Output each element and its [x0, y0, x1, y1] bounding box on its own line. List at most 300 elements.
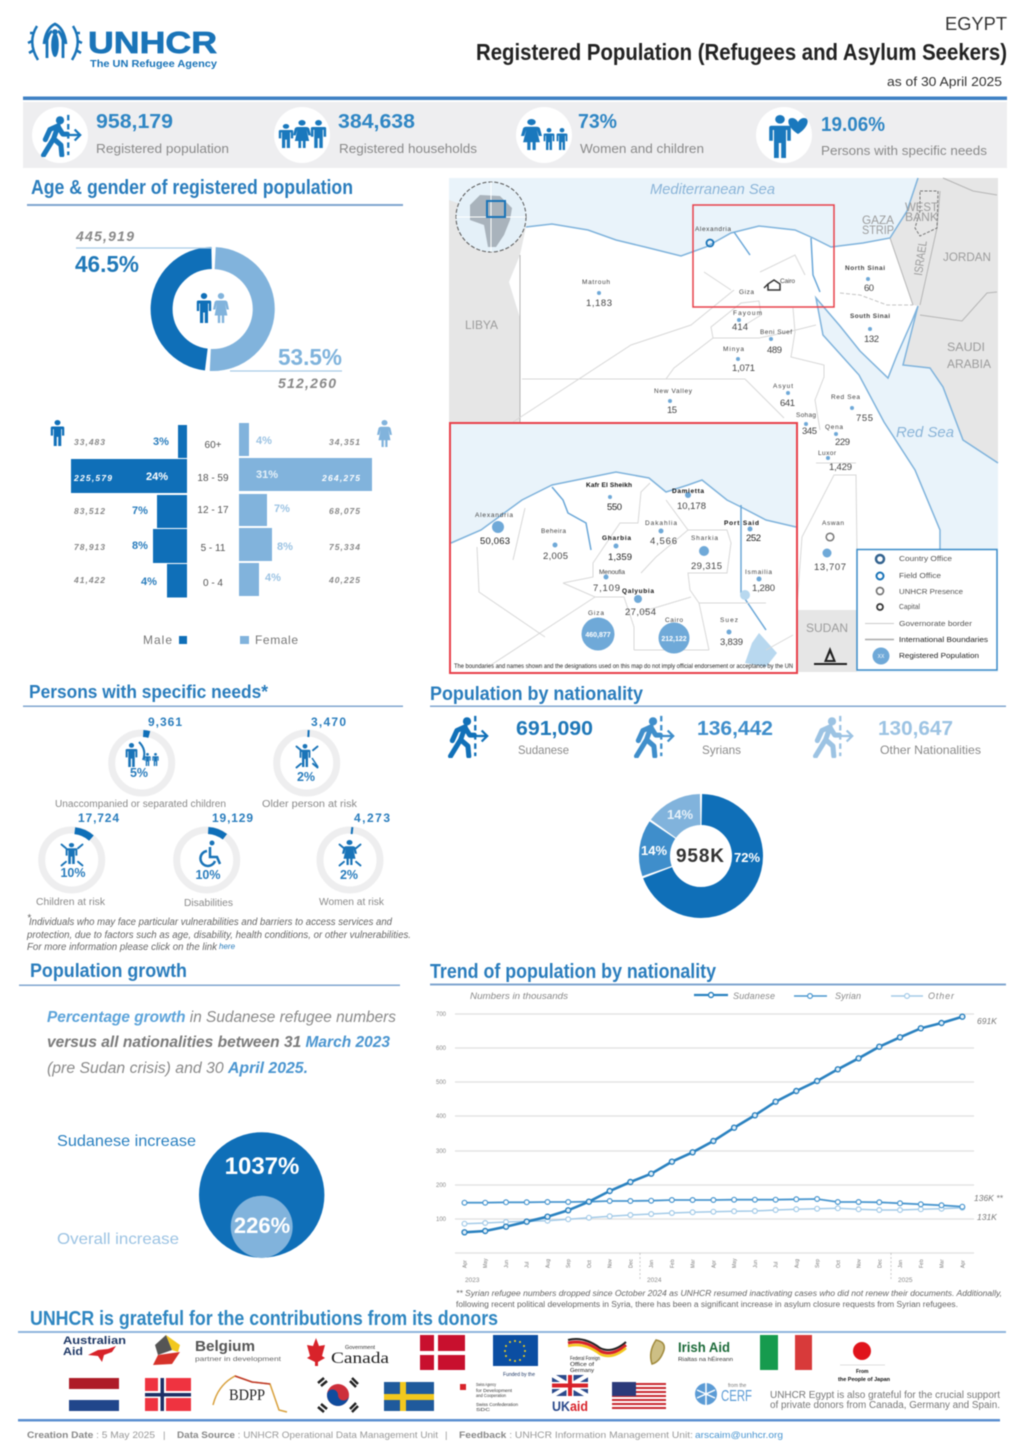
- inset labels: Gharbia: [602, 535, 631, 542]
- wordmark: UNHCR: [88, 25, 217, 60]
- nationality donut chart: 14%: [667, 807, 693, 822]
- inset labels: 1,359: [608, 552, 632, 563]
- footer: [27, 1430, 783, 1441]
- map labels: seas and countries: ISRAEL: [911, 240, 930, 276]
- Egypt land: [509, 224, 940, 610]
- donor: Switzerland: Swiss Agency: [476, 1382, 497, 1387]
- donor: Belgium: partner in development: [195, 1357, 281, 1363]
- map legend: International Boundaries: [899, 635, 988, 644]
- donor: Irish Aid: Rialtas na hÉireann: [678, 1356, 733, 1363]
- donor: Irish Aid: Irish Aid: [678, 1339, 730, 1355]
- grid and axis: Jun: [753, 1260, 759, 1268]
- stat: Syrians: 136,442: [697, 718, 773, 740]
- inset labels: Giza: [588, 610, 604, 617]
- gender donut chart: 46.5%: [75, 251, 139, 277]
- need: children at risk: 10%: [60, 866, 86, 880]
- need: women at risk: 2%: [340, 868, 358, 882]
- map labels: seas and countries: BANK: [905, 210, 938, 224]
- inset labels: 7,109: [593, 583, 620, 594]
- series: Sudanese: [464, 1017, 962, 1232]
- heading: Age & gender of registered population: [31, 177, 353, 199]
- neighbouring land: [449, 178, 998, 672]
- heading: Population by nationality: [430, 684, 643, 705]
- chart legend: Sudanese: [733, 991, 775, 1001]
- series end labels: 691K: [977, 1016, 997, 1026]
- need: disabilities: 10%: [195, 868, 221, 882]
- need: disabilities: [177, 811, 253, 909]
- nationality donut chart: 14%: [641, 843, 667, 858]
- map labels: governorates: 641: [780, 398, 795, 409]
- male values: 3%: [153, 436, 169, 448]
- map labels: governorates: Beni Suef: [760, 329, 792, 336]
- female values: 4%: [265, 572, 281, 584]
- heading: Persons with specific needs*: [29, 682, 268, 702]
- female values: [256, 435, 360, 585]
- map labels: seas and countries: GAZA: [862, 213, 894, 227]
- map labels: seas and countries: SUDAN: [806, 621, 848, 635]
- donor: Australian Aid: Aid: [63, 1346, 83, 1358]
- age labels: 5 - 11: [201, 543, 226, 554]
- inset bubbles: [492, 492, 762, 654]
- grid and axis: 700: [436, 1012, 447, 1018]
- map labels: governorates: [582, 226, 890, 573]
- map labels: seas and countries: JORDAN: [943, 250, 991, 264]
- KPI: persons with specific needs: 19.06%: [821, 114, 885, 136]
- map labels: governorates: New Valley: [654, 388, 693, 395]
- need: older person at risk: Older person at risk: [262, 799, 358, 810]
- panel: persons with specific needs: [23, 682, 411, 953]
- map labels: governorates: 1,183: [586, 298, 612, 309]
- private donors note: [770, 1390, 1000, 1411]
- map labels: governorates: 489: [767, 345, 782, 356]
- need: older person at risk: [262, 715, 358, 810]
- pyramid legend: Female: [255, 633, 298, 647]
- Sinai governorate divide: [840, 293, 913, 305]
- private donors note: UNHCR Egypt is also grateful for the crucial support: [770, 1390, 1000, 1401]
- donor: Japan: the People of Japan: [838, 1377, 891, 1383]
- grid and axis: Oct: [836, 1260, 842, 1268]
- grid and axis: Aug: [546, 1259, 552, 1268]
- footer: |: [445, 1430, 447, 1441]
- donor: United States flag: [612, 1382, 666, 1409]
- KPI: women and children: [516, 107, 704, 163]
- chart legend: [694, 991, 955, 1001]
- male values: [73, 436, 169, 588]
- chart legend: Syrian: [835, 991, 861, 1001]
- map labels: governorates: North Sinai: [845, 265, 885, 272]
- donor: Sweden flag: [384, 1382, 434, 1411]
- map labels: governorates: 1,071: [732, 363, 755, 374]
- map legend: Governorate border: [899, 619, 973, 628]
- grid and axis: Jul: [774, 1262, 780, 1268]
- inset labels: Alexandria: [475, 512, 513, 519]
- map disclaimer: The boundaries and names shown and the designations used on this map do not imply official endorsement or acceptance by the UN: [454, 664, 793, 670]
- nested circle chart: [199, 1132, 324, 1258]
- need: unaccompanied or separated children: 5%: [130, 766, 148, 780]
- grid and axis: Apr: [462, 1260, 468, 1268]
- icon: wreath and sheltered figure: [28, 24, 82, 60]
- KPI band: [23, 102, 1007, 168]
- male values: 78,913: [74, 542, 105, 552]
- stat: other nationalities: [816, 716, 981, 757]
- male values: 33,483: [74, 437, 105, 447]
- title block: [476, 14, 1007, 89]
- grid and axis: Apr: [712, 1260, 718, 1268]
- need: older person at risk: 2%: [297, 770, 315, 784]
- age labels: 12 - 17: [197, 505, 229, 516]
- inset labels: 550: [607, 502, 622, 513]
- map labels: seas and countries: LIBYA: [465, 318, 498, 332]
- donor: Switzerland: SDC: [476, 1407, 491, 1412]
- age labels: [197, 440, 229, 589]
- stat: Syrians: [636, 716, 773, 757]
- grid and axis: Sep: [566, 1259, 572, 1268]
- need: children at risk: Children at risk: [36, 897, 106, 908]
- donor: Italy flag: [760, 1335, 812, 1370]
- footnote: *: [27, 913, 32, 924]
- map labels: governorates: 15: [667, 405, 677, 416]
- chart footnote: [456, 1289, 1002, 1309]
- map legend: Capital: [899, 602, 920, 611]
- female values: 68,075: [329, 506, 360, 516]
- KPI: registered population: 958,179: [96, 111, 173, 133]
- inset labels: Ismailia: [745, 569, 772, 576]
- inset labels: 212,122: [661, 636, 687, 643]
- map labels: governorates: 755: [856, 413, 873, 424]
- panel: trend of population by nationality: [430, 961, 1006, 1309]
- need: women at risk: Women at risk: [319, 897, 385, 908]
- grid and axis: Nov: [608, 1259, 614, 1268]
- inset labels: Menoufia: [599, 569, 625, 576]
- chart footnote: following recent political developments in Syria, there has been a significant increase in asylum closure requests from Syrian refugees.: [456, 1300, 958, 1309]
- series end labels: 131K: [977, 1212, 997, 1222]
- map legend: Field Office: [899, 571, 941, 580]
- map labels: seas and countries: WEST: [905, 200, 939, 214]
- map labels: governorates: Alexandria: [695, 226, 731, 233]
- donor: EU flag: [493, 1335, 538, 1378]
- map labels: governorates: 345: [802, 426, 817, 437]
- inset labels: 1,280: [752, 583, 775, 594]
- donor: Germany: [568, 1339, 626, 1374]
- donor: CERF: CERF: [721, 1388, 752, 1405]
- age labels: 0 - 4: [203, 578, 223, 589]
- map labels: seas and countries: ARABIA: [947, 357, 991, 371]
- female values: 40,225: [328, 575, 360, 585]
- nested circle chart: 1037%: [225, 1153, 299, 1180]
- donor: Switzerland: and Cooperation: [476, 1393, 506, 1398]
- footnote: For more information please click on the link: [27, 942, 218, 953]
- heading: Population growth: [30, 961, 187, 982]
- grid and axis: May: [483, 1258, 489, 1268]
- inset labels: 29,315: [691, 561, 722, 572]
- female values: 75,334: [329, 542, 360, 552]
- stat: other nationalities: 130,647: [878, 718, 953, 740]
- male values: 24%: [146, 471, 168, 483]
- donor: CERF: [695, 1383, 752, 1405]
- map labels: governorates: Sohag: [796, 412, 816, 419]
- map labels: seas and countries: STRIP: [862, 223, 894, 237]
- KPI: women and children: 73%: [578, 111, 617, 133]
- KPI: registered population: [32, 107, 229, 163]
- grid and axis: [436, 1012, 974, 1284]
- female values: 7%: [274, 503, 290, 515]
- map labels: governorates: Red Sea: [831, 394, 860, 401]
- footnote: Individuals who may face particular vulnerabilities and barriers to access services and: [29, 917, 392, 928]
- donor: Australian Aid: Australian: [63, 1335, 126, 1347]
- inset governorate lines: [477, 483, 793, 665]
- female values: 31%: [256, 469, 278, 481]
- map legend: Country Office: [899, 554, 952, 563]
- need: unaccompanied or separated children: [55, 715, 226, 810]
- grid and axis: May: [732, 1258, 738, 1268]
- inset labels: Dakahlia: [645, 520, 677, 527]
- KPI: women and children: Women and children: [580, 141, 704, 156]
- map labels: governorates: Giza: [739, 289, 754, 296]
- inset labels: Kafr El Sheikh: [586, 482, 632, 489]
- increase labels: Sudanese increase: [57, 1133, 196, 1150]
- stat: Sudanese: 691,090: [516, 718, 593, 740]
- grid and axis: Nov: [856, 1259, 862, 1268]
- grid and axis: Jan: [898, 1260, 904, 1268]
- heading: Trend of population by nationality: [430, 961, 717, 983]
- donor: Australian Aid: [63, 1335, 126, 1362]
- footer: Data Source : UNHCR Operational Data Management Unit: [177, 1430, 438, 1441]
- stat: other nationalities: Other Nationalities: [880, 743, 981, 757]
- series end labels: 136K **: [974, 1193, 1004, 1203]
- female values: 34,351: [329, 437, 360, 447]
- need: unaccompanied or separated children: 9,361: [148, 715, 182, 729]
- inset labels: Qalyubia: [622, 588, 654, 595]
- female bars: [239, 423, 372, 596]
- West Bank outline: [915, 191, 938, 236]
- UNHCR logo: [28, 24, 217, 70]
- pyramid legend: [143, 633, 298, 647]
- description: Percentage growth in Sudanese refugee numbers: [47, 1009, 396, 1026]
- map labels: seas and countries: SAUDI: [947, 340, 985, 354]
- female values: 264,275: [321, 473, 360, 483]
- footer: arscaim@unhcr.org: [695, 1430, 783, 1441]
- KPI: registered households: [274, 107, 478, 163]
- grid and axis: Apr: [960, 1260, 966, 1268]
- need: children at risk: 17,724: [78, 811, 119, 825]
- donor: Switzerland: [460, 1382, 518, 1412]
- footnote: [26, 913, 411, 953]
- grid and axis: Oct: [587, 1260, 593, 1268]
- panel: population by nationality: [430, 684, 1006, 902]
- donor: EU flag: Funded by the: [503, 1372, 535, 1378]
- donor: Belgium: Belgium: [195, 1338, 255, 1355]
- tagline: The UN Refugee Agency: [90, 58, 217, 70]
- footnote: protection, due to factors such as age, disability, health conditions, or other vulnerabilities.: [26, 930, 411, 941]
- map labels: governorates: 132: [864, 334, 879, 345]
- map legend: Registered Population: [899, 651, 979, 660]
- need: disabilities: 19,129: [212, 811, 253, 825]
- map labels: governorates: Aswan: [822, 520, 844, 527]
- map labels: governorates: South Sinai: [850, 313, 890, 320]
- grid and axis: 600: [436, 1046, 447, 1052]
- inset labels: 460,877: [585, 632, 611, 639]
- need: women at risk: [319, 811, 390, 908]
- donor: Norway flag: [145, 1378, 191, 1411]
- red extent box: [693, 205, 834, 307]
- footnote: here: [219, 942, 236, 951]
- country: EGYPT: [945, 14, 1007, 34]
- icon: female: [377, 420, 392, 447]
- inset labels: 252: [746, 533, 761, 544]
- donor: Japan: From: [856, 1369, 869, 1375]
- grid and axis: 300: [436, 1149, 447, 1155]
- donor: Canada: Canada: [331, 1350, 389, 1367]
- heading: UNHCR is grateful for the contributions from its donors: [30, 1307, 498, 1330]
- donor: Irish Aid: [651, 1339, 733, 1364]
- map labels: governorates: Qena: [825, 424, 843, 431]
- need: women at risk: 4,273: [354, 811, 390, 825]
- gender donut chart: [75, 228, 342, 391]
- KPI: registered households: Registered households: [339, 141, 478, 156]
- donor: Denmark flag: [420, 1335, 465, 1370]
- need: older person at risk: 3,470: [311, 715, 346, 729]
- donor: Germany: Germany: [570, 1368, 595, 1374]
- male values: 4%: [141, 576, 157, 588]
- KPI: registered households: 384,638: [338, 111, 415, 133]
- grid and axis: 500: [436, 1080, 447, 1086]
- series: Syrian: [464, 1199, 962, 1207]
- gender donut chart: 512,260: [278, 375, 336, 391]
- grid and axis: Jul: [524, 1262, 530, 1268]
- grid and axis: 100: [436, 1217, 447, 1223]
- KPI: persons with specific needs: [756, 107, 988, 163]
- stat: Sudanese: Sudanese: [518, 743, 569, 757]
- donor: Belgium: [153, 1335, 281, 1365]
- grid and axis: Feb: [670, 1259, 676, 1268]
- panel: donors: [18, 1307, 1006, 1414]
- KPI: persons with specific needs: Persons with specific needs: [821, 143, 988, 158]
- map labels: governorates: Luxor: [818, 450, 837, 457]
- male values: 225,579: [73, 473, 112, 483]
- inset labels: 4,566: [650, 536, 677, 547]
- map labels: governorates: Minya: [723, 346, 744, 353]
- grid and axis: Feb: [919, 1259, 925, 1268]
- donor: Republic of Korea flag: [318, 1378, 358, 1412]
- description: (pre Sudan crisis) and 30 April 2025.: [47, 1060, 308, 1077]
- inset labels: [475, 482, 775, 648]
- donor: Germany: Federal Foreign: [570, 1356, 600, 1362]
- female values: 4%: [256, 435, 272, 447]
- nationality donut chart: 72%: [734, 850, 760, 865]
- inset map: Nile Delta: [450, 423, 797, 673]
- grid and axis: Dec: [628, 1259, 634, 1268]
- footer: Feedback : UNHCR Information Management Unit:: [459, 1430, 693, 1441]
- icon: north arrow: [814, 647, 847, 665]
- date: as of 30 April 2025: [887, 74, 1002, 89]
- grid and axis: Dec: [878, 1259, 884, 1268]
- map legend: XX: [878, 654, 885, 660]
- map legend: [857, 550, 997, 670]
- nested circle chart: 226%: [234, 1213, 290, 1238]
- gender donut chart: 53.5%: [278, 344, 342, 370]
- inset labels: Suez: [720, 617, 738, 624]
- river Nile and canal: [734, 232, 820, 292]
- map labels: governorates: 1,429: [829, 462, 852, 473]
- description: [47, 1009, 396, 1077]
- need: disabilities: Disabilities: [184, 898, 233, 909]
- KPI: registered population: Registered population: [96, 141, 229, 156]
- icon: male: [51, 420, 64, 446]
- map legend: UNHCR Presence: [899, 587, 963, 596]
- age labels: 18 - 59: [197, 473, 229, 484]
- chart legend: Other: [928, 991, 955, 1001]
- donor: Canada: Government: [345, 1345, 376, 1351]
- map labels: governorates: 414: [732, 322, 748, 333]
- male values: 7%: [132, 505, 148, 517]
- male values: 8%: [132, 540, 148, 552]
- grid and axis: 2024: [647, 1277, 662, 1284]
- grid and axis: Mar: [940, 1259, 946, 1268]
- donor: Switzerland: Swiss Confederation: [476, 1402, 518, 1407]
- map labels: governorates: 60: [864, 283, 874, 294]
- inset labels: 3,839: [720, 637, 743, 648]
- map labels: governorates: 229: [835, 437, 850, 448]
- stat: Sudanese: [450, 716, 593, 757]
- population pyramid: [51, 420, 392, 647]
- need: unaccompanied or separated children: Unaccompanied or separated children: [55, 799, 226, 810]
- inset waterways: [552, 487, 766, 630]
- map labels: seas and countries: Mediterranean Sea: [650, 181, 775, 198]
- donor: Germany: Office of: [570, 1362, 595, 1368]
- inset labels: 10,178: [677, 501, 706, 512]
- borders: [520, 178, 997, 430]
- grid and axis: 400: [436, 1114, 447, 1120]
- series: other nationalities: [464, 1208, 962, 1224]
- chart footnote: ** Syrian refugee numbers dropped since October 2024 as UNHCR resumed inactivating cases who did not renew their documents. Additionally,: [456, 1289, 1002, 1298]
- map labels: governorates: Cairo: [780, 278, 795, 285]
- donor: Japan: [838, 1342, 891, 1383]
- inset labels: 50,063: [480, 536, 510, 547]
- grid and axis: Mar: [690, 1259, 696, 1268]
- donor: Netherlands flag: [69, 1378, 119, 1411]
- female values: 8%: [277, 541, 293, 553]
- donor: Canada: [307, 1338, 389, 1367]
- panel: population growth: [19, 961, 400, 1258]
- grid and axis: 2023: [465, 1277, 480, 1284]
- grid and axis: Jun: [504, 1260, 510, 1268]
- private donors note: of private donors from Canada, Germany and Spain.: [770, 1400, 1000, 1411]
- inset labels: Port Said: [724, 520, 759, 527]
- male values: 83,512: [74, 506, 105, 516]
- grid and axis: 2025: [898, 1277, 913, 1284]
- male values: 41,422: [73, 575, 105, 585]
- locator globe: [456, 182, 526, 252]
- grid and axis: Sep: [815, 1259, 821, 1268]
- map labels: governorates: Asyut: [773, 383, 793, 390]
- grid and axis: Aug: [794, 1259, 800, 1268]
- inset labels: 2,005: [543, 551, 568, 562]
- description: versus all nationalities between 31 March 2023: [47, 1034, 390, 1051]
- male bars: [71, 425, 187, 598]
- nationality donut chart: 958K: [676, 846, 724, 867]
- nationality donut chart: [641, 807, 760, 902]
- axis title: Numbers in thousands: [470, 991, 569, 1001]
- inset labels: Beheira: [541, 528, 566, 535]
- panel: map of Egypt: [449, 178, 998, 673]
- pyramid legend: Male: [143, 633, 172, 647]
- inset labels: Cairo: [665, 617, 683, 624]
- grid and axis: 200: [436, 1183, 447, 1189]
- footer: Creation Date : 5 May 2025: [27, 1430, 155, 1441]
- donor: UK aid: UKaid: [552, 1398, 588, 1414]
- need: children at risk: [36, 811, 119, 908]
- series end labels: [974, 1016, 1004, 1222]
